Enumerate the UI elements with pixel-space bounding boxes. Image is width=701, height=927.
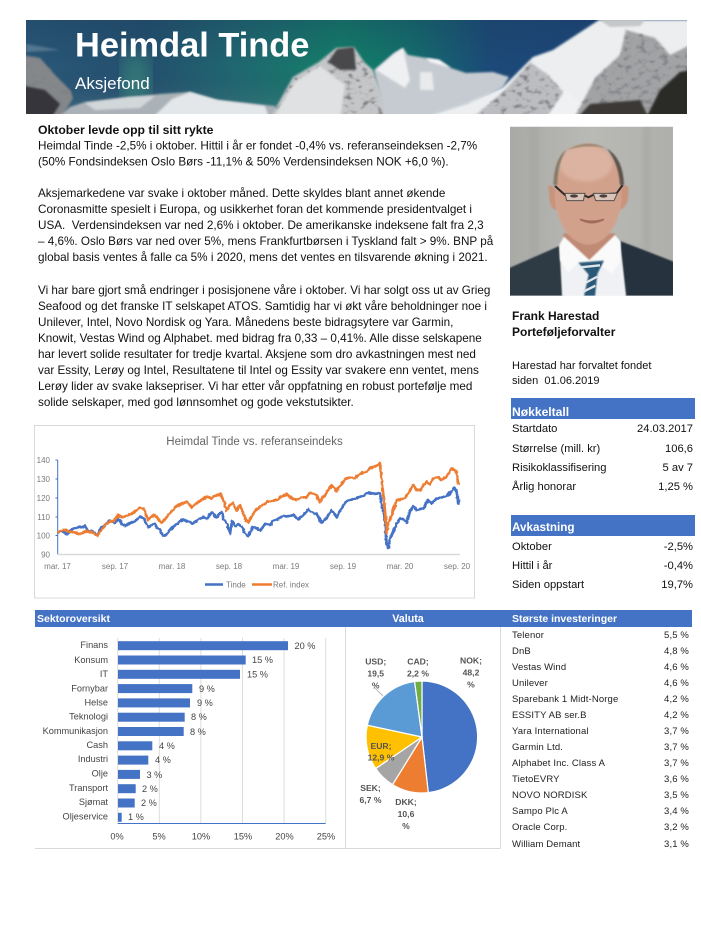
y axis labels: 110 bbox=[37, 513, 51, 522]
sector names: Konsum bbox=[74, 655, 108, 665]
sector values: 4 % bbox=[159, 741, 175, 751]
Avkastning heading: Avkastning bbox=[512, 521, 575, 534]
table: largest holdings bbox=[512, 630, 689, 850]
pie labels bbox=[360, 656, 482, 831]
pie slices bbox=[366, 681, 478, 793]
table: largest holdings: 4,8 % bbox=[664, 646, 689, 657]
bar axis labels: 5% bbox=[152, 832, 166, 842]
manager role: Porteføljeforvalter bbox=[512, 325, 616, 339]
table: largest holdings: TietoEVRY bbox=[512, 774, 560, 785]
pie labels: 2,2 % bbox=[407, 668, 429, 678]
x axis labels: mar. 20 bbox=[387, 562, 414, 571]
pie labels: USD; bbox=[365, 656, 386, 666]
sector names bbox=[43, 640, 108, 822]
Sektoroversikt heading: Sektoroversikt bbox=[37, 613, 110, 625]
sector values: 9 % bbox=[197, 698, 213, 708]
table: largest holdings: Sampo Plc A bbox=[512, 806, 568, 817]
table: largest holdings: 3,2 % bbox=[664, 822, 689, 833]
Avkastning rows: 19,7% bbox=[661, 579, 693, 591]
Avkastning rows: Hittil i år bbox=[512, 560, 553, 572]
portfolio paragraph: solide selskaper, med god lønnsomhet og gode vekstutsikter. bbox=[38, 396, 354, 409]
table: largest holdings: 4,6 % bbox=[664, 662, 689, 673]
y axis labels: 90 bbox=[41, 550, 51, 560]
Avkastning rows bbox=[512, 541, 693, 591]
sector values bbox=[128, 641, 315, 822]
pie labels: 10,6 bbox=[398, 809, 415, 819]
market paragraph bbox=[38, 187, 494, 264]
bar chart: sectors bbox=[43, 638, 335, 842]
y axis labels: 140 bbox=[37, 456, 51, 465]
intro paragraph bbox=[38, 140, 477, 168]
table: largest holdings: 4,6 % bbox=[664, 678, 689, 689]
manager note: Harestad har forvaltet fondet bbox=[512, 360, 651, 372]
pie labels: % bbox=[402, 821, 410, 831]
manager details bbox=[512, 309, 651, 387]
sector values: 8 % bbox=[191, 712, 207, 722]
intro paragraph: (50% Fondsindeksen Oslo Børs -11,1% & 50% Verdensindeksen NOK +6,0 %). bbox=[38, 156, 449, 168]
market paragraph: Coronasmitte spesielt i Europa, og usikkerhet foran det kommende presidentvalget i bbox=[38, 203, 472, 216]
market paragraph: global basis ventes å falle ca 5% i 2020, mens det ventes en tilsvarende økning i 2021. bbox=[38, 251, 488, 264]
table: largest holdings: 3,1 % bbox=[664, 839, 689, 850]
bar axis labels: 0% bbox=[110, 832, 124, 842]
sector names: IT bbox=[100, 669, 108, 679]
x axis labels: sep. 19 bbox=[330, 562, 357, 571]
pie labels: 19,5 bbox=[367, 668, 384, 678]
header banner bbox=[20, 20, 700, 120]
Nøkkeltall rows: 5 av 7 bbox=[663, 462, 693, 474]
table: largest holdings: 3,7 % bbox=[664, 758, 689, 769]
sector names: Oljeservice bbox=[63, 812, 108, 822]
pie labels: % bbox=[372, 680, 380, 690]
sector values: 4 % bbox=[155, 755, 171, 765]
table: largest holdings: NOVO NORDISK bbox=[512, 790, 588, 801]
table: largest holdings: Unilever bbox=[512, 678, 548, 689]
portfolio paragraph: var Essity, Lerøy og Intel, Resultatene til Intel og Essity var svakere enn ventet, mens bbox=[38, 364, 479, 377]
bar axis labels: 10% bbox=[192, 832, 210, 842]
x axis labels: mar. 18 bbox=[159, 562, 186, 571]
intro paragraph: Heimdal Tinde -2,5% i oktober. Hittil i år er fondet -0,4% vs. referanseindeksen -2,7% bbox=[38, 140, 477, 152]
market paragraph: Aksjemarkedene var svake i oktober måned. Dette skyldes blant annet økende bbox=[38, 187, 445, 200]
pie labels: NOK; bbox=[460, 656, 482, 666]
sector values: 20 % bbox=[294, 641, 315, 651]
sector bars bbox=[118, 641, 288, 822]
pie labels: 6,7 % bbox=[360, 795, 382, 805]
sector names: Cash bbox=[87, 740, 108, 750]
sector names: Industri bbox=[78, 754, 108, 764]
sector values: 3 % bbox=[146, 770, 162, 780]
line chart: Tinde vs reference index bbox=[34, 426, 474, 598]
sector names: Teknologi bbox=[69, 712, 108, 722]
sector names: Kommunikasjon bbox=[43, 726, 108, 736]
table: largest holdings: Alphabet Inc. Class A bbox=[512, 758, 606, 769]
chart legend: Ref. index bbox=[273, 580, 309, 590]
sector values: 8 % bbox=[190, 727, 206, 737]
table: largest holdings: DnB bbox=[512, 646, 531, 657]
banner title: Heimdal Tinde bbox=[75, 26, 309, 64]
Nøkkeltall rows: 24.03.2017 bbox=[637, 423, 693, 435]
Nøkkeltall rows: 1,25 % bbox=[658, 481, 693, 493]
Avkastning rows: -0,4% bbox=[664, 560, 693, 572]
table: largest holdings: 3,7 % bbox=[664, 742, 689, 753]
bar axis labels: 25% bbox=[317, 832, 335, 842]
table: largest holdings: 5,5 % bbox=[664, 630, 689, 641]
x axis labels: sep. 20 bbox=[444, 562, 471, 571]
sector values: 15 % bbox=[247, 670, 268, 680]
sector values: 2 % bbox=[142, 784, 158, 794]
table: largest holdings: ESSITY AB ser.B bbox=[512, 710, 587, 721]
sector names: Finans bbox=[80, 640, 108, 650]
x axis labels: mar. 17 bbox=[44, 562, 71, 571]
manager note: siden 01.06.2019 bbox=[512, 375, 599, 387]
table: largest holdings: 4,2 % bbox=[664, 710, 689, 721]
commentary heading: Oktober levde opp til sitt rykte bbox=[38, 123, 214, 137]
manager name: Frank Harestad bbox=[512, 309, 599, 323]
y axis labels bbox=[37, 456, 51, 560]
Nøkkeltall rows: Risikoklassifisering bbox=[512, 462, 606, 474]
Avkastning rows: Siden oppstart bbox=[512, 579, 585, 591]
Nøkkeltall rows bbox=[512, 423, 693, 493]
x axis labels bbox=[44, 562, 471, 571]
Valuta heading: Valuta bbox=[392, 613, 425, 625]
panel: Nøkkeltall bbox=[511, 398, 695, 493]
table: largest holdings: 3,4 % bbox=[664, 806, 689, 817]
table: largest holdings: Yara International bbox=[512, 726, 589, 737]
chart title: Heimdal Tinde vs. referanseindeks bbox=[166, 436, 343, 448]
pie labels: EUR; bbox=[370, 741, 392, 751]
pie labels: SEK; bbox=[360, 783, 381, 793]
sector names: Sjømat bbox=[79, 797, 108, 807]
portfolio paragraph: har levert solide resultater for tredje kvartal. Aksjene som dro avkastningen mest ned bbox=[38, 348, 476, 361]
bar axis labels: 20% bbox=[275, 832, 294, 842]
sector names: Fornybar bbox=[71, 684, 108, 694]
pie labels: % bbox=[467, 680, 475, 690]
chart legend: Tinde bbox=[226, 580, 246, 590]
manager note bbox=[512, 360, 651, 387]
bar axis labels bbox=[110, 832, 335, 842]
Avkastning rows: Oktober bbox=[512, 541, 552, 553]
manager portrait bbox=[510, 126, 673, 296]
market paragraph: USA. Verdensindeksen var ned 2,6% i oktober. De amerikanske indeksene falt fra 2,3 bbox=[38, 219, 484, 232]
portfolio paragraph: Lerøy lider av svake laksepriser. Vi har etter vår oppfatning en robust portefølje med bbox=[38, 380, 472, 393]
Nøkkeltall heading: Nøkkeltall bbox=[512, 405, 569, 419]
market paragraph: – 4,6%. Oslo Børs var ned over 5%, mens Frankfurtbørsen i Tyskland falt > 9%. BNP på bbox=[38, 235, 494, 248]
sector names: Transport bbox=[69, 783, 108, 793]
portfolio paragraph: Seafood og det franske IT selskapet ATOS. Samtidig har vi økt våre beholdninger noe i bbox=[38, 300, 487, 313]
table: largest holdings: 4,2 % bbox=[664, 694, 689, 705]
bar axis labels: 15% bbox=[234, 832, 252, 842]
x axis labels: sep. 18 bbox=[216, 562, 243, 571]
y axis labels: 120 bbox=[37, 494, 51, 503]
Nøkkeltall rows: Årlig honorar bbox=[512, 480, 576, 493]
portfolio paragraph bbox=[38, 284, 490, 409]
banner subtitle: Aksjefond bbox=[75, 74, 150, 93]
Største investeringer heading: Største investeringer bbox=[512, 613, 617, 625]
panel: Avkastning bbox=[511, 515, 695, 591]
table: largest holdings: William Demant bbox=[512, 839, 581, 850]
table: largest holdings: Oracle Corp. bbox=[512, 822, 567, 833]
pie labels: 12,9 % bbox=[368, 752, 395, 762]
portfolio paragraph: Unilever, Intel, Novo Nordisk og Yara. Månedens beste bidragsytere var Garmin, bbox=[38, 316, 453, 329]
Avkastning rows: -2,5% bbox=[664, 541, 693, 553]
pie chart: currency bbox=[360, 656, 482, 831]
x axis labels: sep. 17 bbox=[102, 562, 129, 571]
sector values: 2 % bbox=[141, 798, 157, 808]
Nøkkeltall rows: Startdato bbox=[512, 423, 557, 435]
Nøkkeltall rows: Størrelse (mill. kr) bbox=[512, 443, 601, 455]
sector names: Olje bbox=[92, 768, 108, 778]
pie labels: DKK; bbox=[395, 797, 417, 807]
y axis labels: 100 bbox=[37, 532, 51, 540]
table: largest holdings: Garmin Ltd. bbox=[512, 742, 563, 753]
portfolio paragraph: Knowit, Vestas Wind og Alphabet. med bidrag fra 0,33 – 0,41%. Alle disse selskapene bbox=[38, 332, 482, 345]
table: largest holdings: Sparebank 1 Midt-Norge bbox=[512, 694, 618, 705]
chart legend bbox=[205, 580, 309, 590]
sector values: 1 % bbox=[128, 812, 144, 822]
table: largest holdings: Vestas Wind bbox=[512, 662, 566, 673]
table: largest holdings: Telenor bbox=[512, 630, 544, 641]
sector values: 15 % bbox=[252, 655, 273, 665]
y axis labels: 130 bbox=[37, 475, 51, 484]
x axis labels: mar. 19 bbox=[273, 562, 300, 571]
pie labels: 48,2 bbox=[463, 668, 480, 678]
pie labels: CAD; bbox=[407, 656, 429, 666]
table: largest holdings: 3,5 % bbox=[664, 790, 689, 801]
commentary text bbox=[38, 123, 494, 409]
sector names: Helse bbox=[84, 698, 108, 708]
bottom header bar bbox=[35, 610, 692, 627]
series: Ref. index bbox=[58, 463, 458, 536]
table: largest holdings: 3,6 % bbox=[664, 774, 689, 785]
table: largest holdings: 3,7 % bbox=[664, 726, 689, 737]
sector values: 9 % bbox=[199, 684, 215, 694]
series: Tinde bbox=[58, 488, 459, 548]
portfolio paragraph: Vi har bare gjort små endringer i posisjonene våre i oktober. Vi har solgt oss ut av Grieg bbox=[38, 284, 490, 297]
Nøkkeltall rows: 106,6 bbox=[665, 443, 693, 455]
